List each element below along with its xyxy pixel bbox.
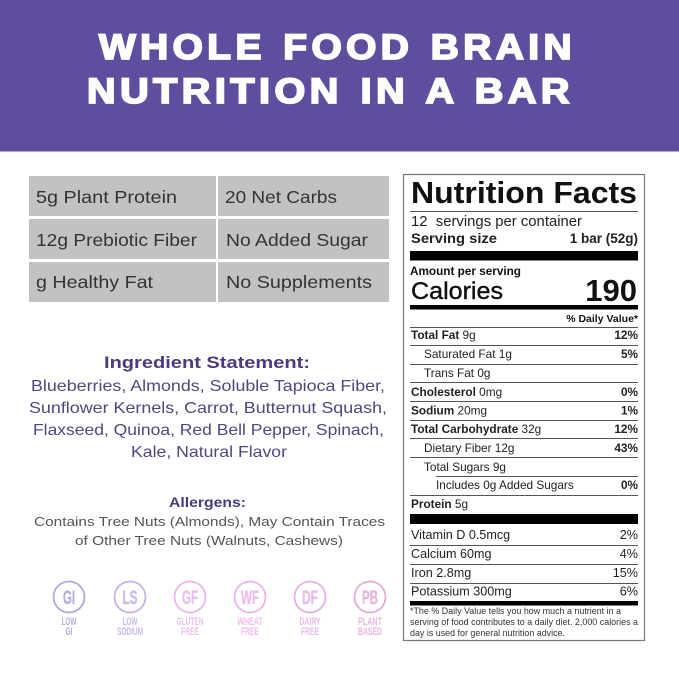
icon: plant based	[354, 582, 386, 638]
footnote	[410, 606, 639, 638]
text block: allergens	[34, 495, 385, 548]
icon: plant based: PB	[362, 588, 378, 609]
icon: wheat free: WHEAT	[238, 616, 263, 628]
footnote: *The % Daily Value tells you how much a nutrient in a	[410, 606, 622, 616]
text block: ingredient statement: Ingredient Statement:	[104, 354, 310, 372]
calories: Calories	[411, 278, 503, 305]
panel: benefits table: 5g Plant Protein	[36, 187, 177, 207]
icon: plant based: BASED	[358, 626, 382, 638]
macronutrient rows: Includes 0g Added Sugars	[436, 478, 574, 492]
icon: plant based: PLANT	[358, 616, 382, 628]
serving information: 12 servings per container	[411, 214, 582, 230]
macronutrient rows: Total Fat 9g	[411, 328, 476, 342]
macronutrient rows: 12%	[614, 328, 638, 342]
macronutrient rows: Protein 5g	[411, 497, 468, 511]
vitamins and minerals: 6%	[620, 584, 638, 598]
header banner	[0, 0, 679, 152]
icon: dairy free	[294, 582, 326, 638]
icon: gluten free: GF	[182, 588, 198, 609]
macronutrient rows: Trans Fat 0g	[424, 366, 490, 380]
calories: Amount per serving	[410, 266, 521, 278]
icon: low GI: GI	[66, 626, 72, 638]
panel: benefits table: No Added Sugar	[226, 230, 368, 250]
macronutrient rows: 43%	[614, 441, 638, 455]
text block: allergens: Contains Tree Nuts (Almonds), May Contain Traces	[34, 514, 385, 529]
icon: gluten free: GLUTEN	[176, 616, 204, 628]
panel: benefits table: 12g Prebiotic Fiber	[36, 230, 197, 250]
icon: low sodium: LOW	[122, 616, 138, 628]
icon: gluten free: FREE	[181, 626, 199, 638]
text block: ingredient statement	[29, 354, 387, 461]
macronutrient rows: Total Sugars 9g	[424, 460, 506, 474]
vitamins and minerals: Vitamin D 0.5mcg	[411, 528, 510, 542]
macronutrient rows: 1%	[621, 404, 638, 418]
icon: low GI: LOW	[62, 616, 77, 628]
text block: ingredient statement: Kale, Natural Flavor	[131, 444, 288, 461]
text block: allergens: of Other Tree Nuts (Walnuts, Cashews)	[75, 533, 343, 548]
icon: low sodium: SODIUM	[117, 626, 143, 638]
macronutrient rows: 5%	[621, 347, 638, 361]
icon: dairy free: FREE	[301, 626, 319, 638]
icon row: dietary badges	[54, 582, 386, 638]
vitamins and minerals: Potassium 300mg	[411, 584, 512, 598]
macronutrient rows: Saturated Fat 1g	[424, 347, 512, 361]
vitamins and minerals	[410, 514, 638, 606]
macronutrient rows: 0%	[621, 478, 638, 492]
vitamins and minerals: 4%	[620, 547, 638, 561]
heading: nutrition facts: Nutrition Facts	[411, 175, 637, 210]
title: NUTRITION IN A BAR	[87, 72, 574, 111]
calories: 190	[585, 273, 637, 308]
text block: allergens: Allergens:	[169, 495, 246, 510]
icon: dairy free: DF	[302, 588, 318, 609]
panel: benefits table	[29, 176, 389, 302]
text block: ingredient statement: Sunflower Kernels, Carrot, Butternut Squash,	[29, 400, 387, 417]
vitamins and minerals: 2%	[620, 528, 638, 542]
icon: dairy free: DAIRY	[300, 616, 321, 628]
macronutrient rows	[410, 327, 638, 511]
icon: low GI: GI	[63, 588, 75, 609]
macronutrient rows: Dietary Fiber 12g	[424, 441, 514, 455]
panel: benefits table: 20 Net Carbs	[225, 187, 337, 207]
panel: benefits table: g Healthy Fat	[36, 272, 153, 292]
macronutrient rows: 0%	[621, 385, 638, 399]
icon: gluten free	[174, 582, 206, 638]
panel: nutrition facts label	[404, 174, 644, 640]
icon: low sodium: LS	[122, 588, 138, 609]
text block: ingredient statement: Blueberries, Almonds, Soluble Tapioca Fiber,	[31, 378, 385, 395]
serving information	[410, 211, 638, 260]
vitamins and minerals: Calcium 60mg	[411, 547, 492, 561]
title	[87, 28, 576, 111]
icon: wheat free: WF	[241, 588, 259, 609]
calories: % Daily Value*	[566, 313, 639, 325]
icon: low sodium	[114, 582, 146, 638]
title: WHOLE FOOD BRAIN	[99, 28, 576, 67]
calories	[410, 266, 639, 325]
macronutrient rows: Total Carbohydrate 32g	[411, 422, 541, 436]
macronutrient rows: 12%	[614, 422, 638, 436]
icon: wheat free: FREE	[241, 626, 259, 638]
serving information: 1 bar (52g)	[570, 231, 638, 246]
footnote: serving of food contributes to a daily diet. 2,000 calories a	[410, 617, 639, 627]
macronutrient rows: Cholesterol 0mg	[411, 385, 502, 399]
icon: low GI	[54, 582, 84, 638]
vitamins and minerals: Iron 2.8mg	[411, 566, 471, 580]
macronutrient rows: Sodium 20mg	[411, 404, 487, 418]
text block: ingredient statement: Flaxseed, Quinoa, Red Bell Pepper, Spinach,	[33, 422, 384, 439]
panel: benefits table: No Supplements	[226, 272, 372, 292]
footnote: day is used for general nutrition advice.	[410, 628, 565, 638]
vitamins and minerals: 15%	[613, 566, 638, 580]
icon: wheat free	[234, 582, 266, 638]
serving information: Serving size	[411, 231, 498, 246]
